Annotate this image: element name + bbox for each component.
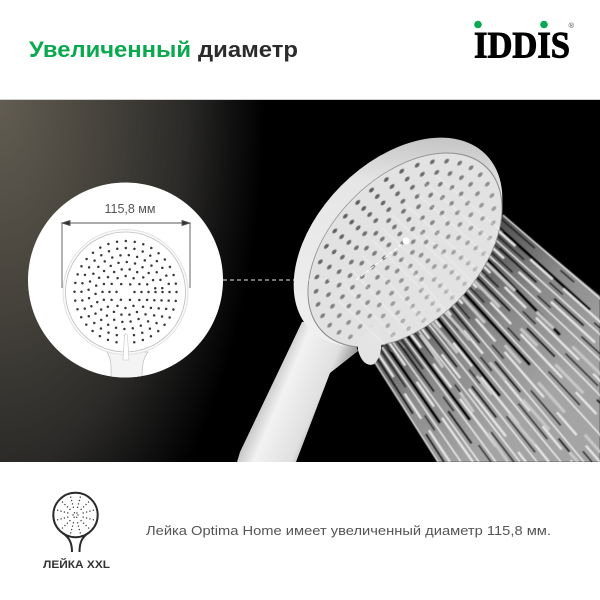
dashed pointer line [223,238,410,280]
selector tab [358,320,381,365]
icon: shower head XXL [53,493,98,552]
water over face [338,175,503,352]
inset head [63,230,188,360]
title: диаметр [198,37,298,62]
head face with nozzles [308,152,502,348]
handle [237,320,358,462]
inset circle: front view of head [28,182,223,380]
dimension label: 115,8 мм [104,202,156,216]
dimension arrow [62,220,190,288]
title: Увеличенный [29,37,191,62]
inset handle [107,352,148,380]
logo: IDDIS: IDDIS [474,26,570,66]
title [29,37,298,62]
description text: Лейка Optima Home имеет увеличенный диаметр 115,8 мм. [146,524,551,538]
shower head photo [237,138,504,462]
icon label: ЛЕЙКА XXL [43,558,110,571]
head rim [294,138,502,346]
photo background panel [0,99,600,462]
water spray [372,215,600,462]
logo: IDDIS: ® [568,21,574,30]
inset selector tab [123,334,129,360]
